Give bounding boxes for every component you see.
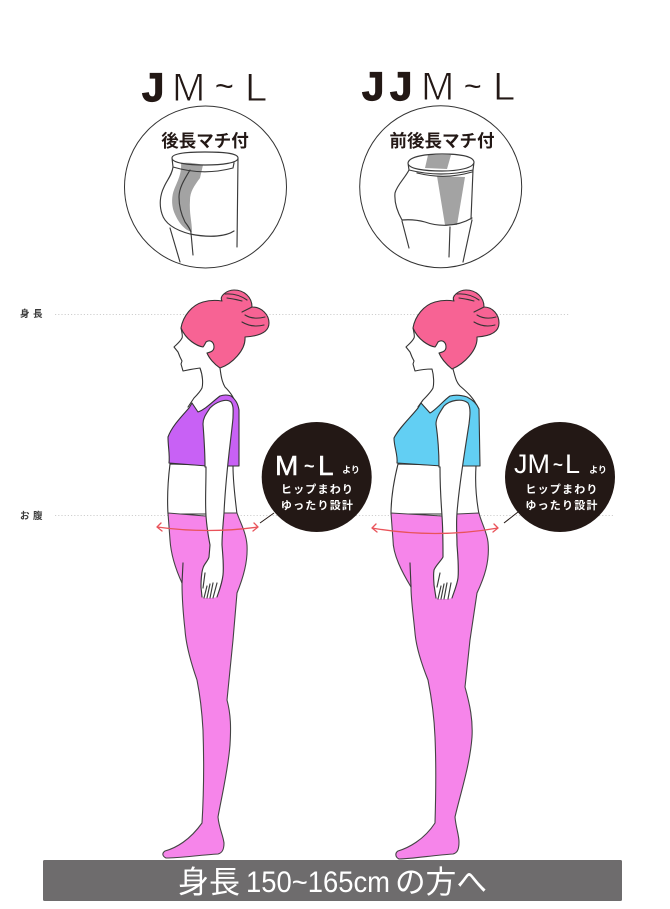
callout: M~L: ゆったり設計 — [281, 498, 354, 512]
face and neck — [406, 328, 478, 412]
arm and hand — [434, 400, 470, 599]
heading: JJ M~L: L — [493, 65, 515, 109]
inset title: back gusset: 後長マチ付 — [161, 131, 249, 151]
heading: JJ M~L: ~ — [464, 70, 482, 103]
bottom banner: 身長 — [178, 865, 240, 900]
heading: JJ M~L: J — [390, 65, 412, 109]
callout: JM~L: JM — [514, 449, 550, 479]
bottom banner: 150~165cm — [246, 866, 390, 899]
crop top: purple — [168, 395, 239, 466]
callout: M~L: ~ — [304, 456, 315, 476]
hair — [181, 290, 269, 368]
callout: M~L: M — [275, 450, 298, 481]
callout: M~L: ヒップまわり — [281, 483, 354, 496]
waist arrow: right — [372, 524, 498, 534]
heading: JJ M~L: M — [421, 65, 454, 109]
gusset area: back — [172, 163, 203, 232]
inset title: front and back gusset: 前後長マチ付 — [390, 131, 494, 151]
face and neck — [174, 328, 238, 412]
callout: M~L — [260, 422, 372, 532]
callout: M~L: より — [342, 465, 360, 475]
crop top: blue — [394, 395, 480, 466]
figure: left woman — [157, 290, 269, 858]
heading: J M~L: ~ — [215, 68, 234, 104]
callout: JM~L: ~ — [553, 455, 563, 474]
heading: J M~L: J — [142, 66, 164, 110]
callout: JM~L: より — [589, 465, 607, 475]
bottom banner: の方へ — [395, 865, 487, 900]
hair — [413, 290, 499, 369]
label: belly: お腹 — [20, 510, 46, 522]
heading: J M~L — [142, 66, 267, 110]
callout: JM~L — [504, 422, 615, 532]
callout: JM~L: ゆったり設計 — [525, 498, 599, 512]
inset: back gusset — [124, 106, 286, 268]
callout: JM~L: L — [565, 449, 580, 479]
heading: J M~L: L — [245, 66, 267, 110]
arm and hand — [201, 400, 233, 598]
callout: JM~L: ヒップまわり — [525, 483, 599, 496]
figure: right woman — [372, 290, 499, 859]
midriff — [168, 464, 237, 514]
bottom banner — [43, 860, 622, 901]
waist arrow: left — [157, 523, 258, 531]
inset: front and back gusset — [360, 106, 522, 268]
heading: JJ M~L — [362, 65, 515, 109]
tights — [391, 513, 488, 859]
gusset area: front and back — [425, 155, 465, 225]
tights — [163, 513, 247, 858]
heading: J M~L: M — [172, 66, 205, 110]
heading: JJ M~L: J — [362, 65, 384, 109]
midriff — [391, 464, 479, 514]
label: height: 身長 — [20, 308, 46, 320]
callout: M~L: L — [318, 450, 334, 481]
